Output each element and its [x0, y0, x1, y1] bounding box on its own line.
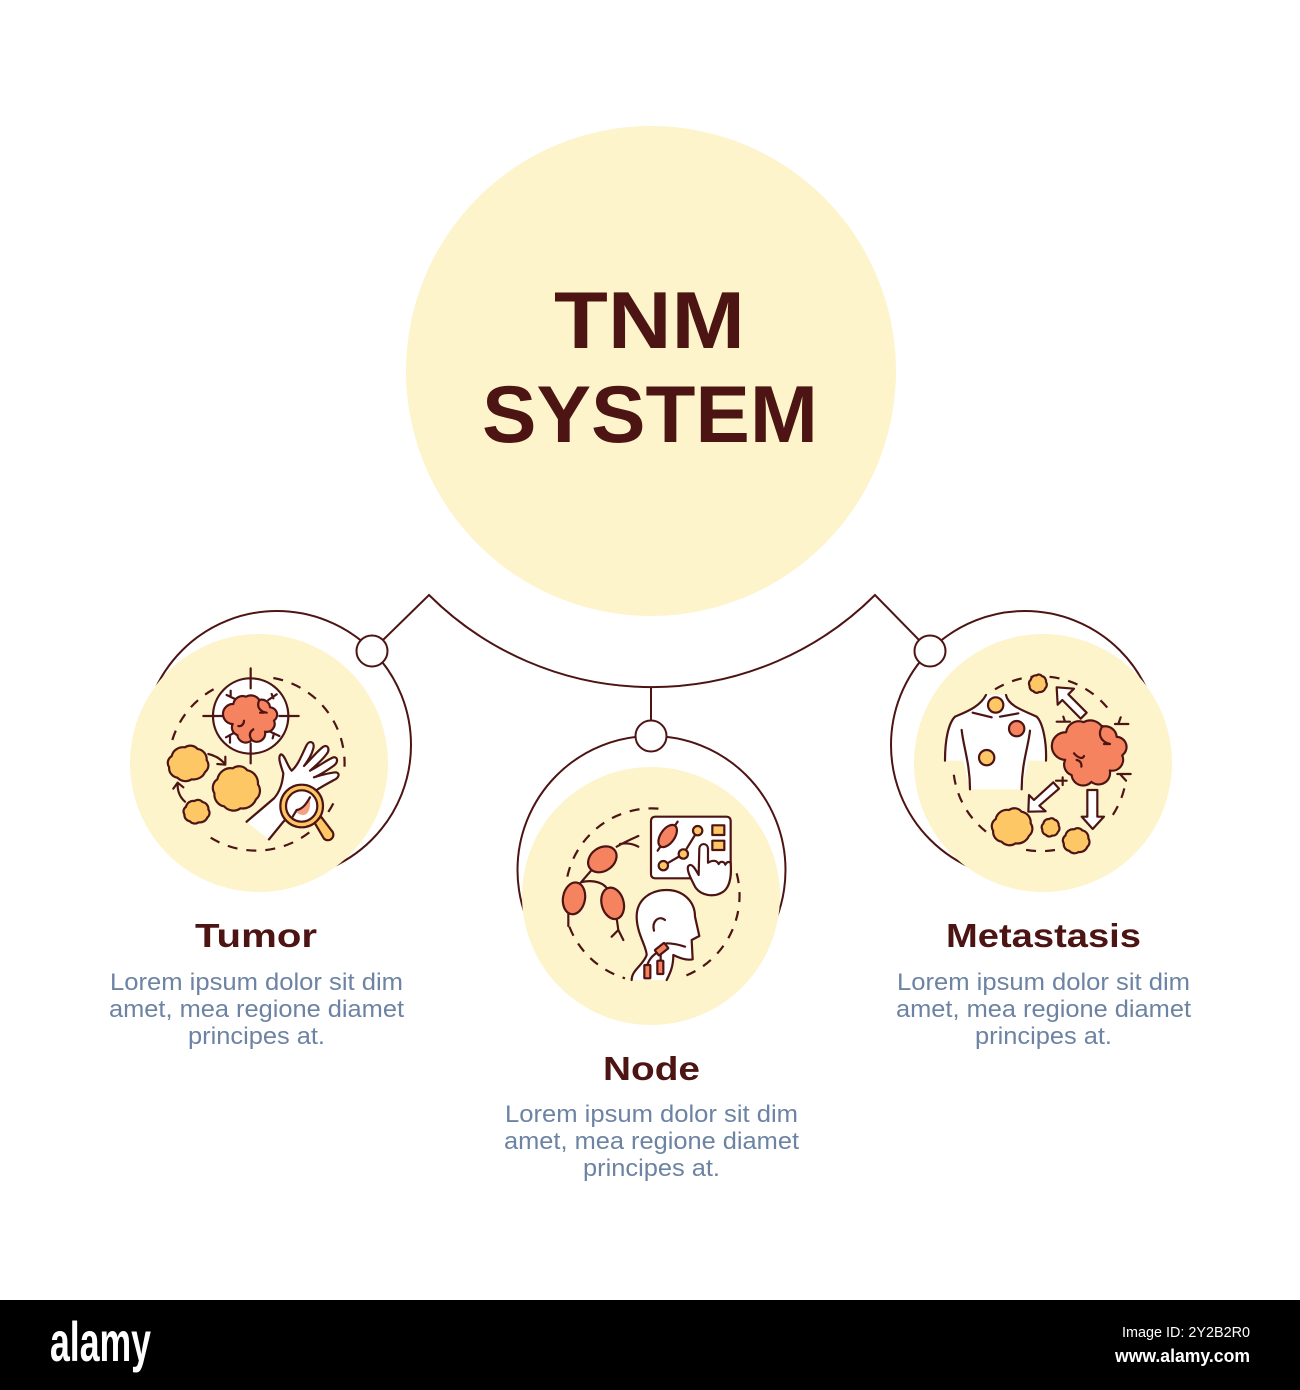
central circle with title — [406, 126, 896, 616]
icon: tumor — [168, 668, 345, 851]
text: metastasis description: Lorem ipsum dolor sit dim — [897, 969, 1190, 996]
text: metastasis description: amet, mea regione diamet — [896, 996, 1191, 1023]
text: node description: amet, mea regione diamet — [504, 1128, 799, 1155]
text: node description: principes at. — [583, 1155, 720, 1182]
connector lines — [383, 595, 919, 721]
text: tumor description — [109, 969, 404, 1050]
text: node description: Lorem ipsum dolor sit dim — [505, 1101, 798, 1128]
label: Metastasis: Metastasis — [946, 917, 1141, 954]
text: metastasis description — [896, 969, 1191, 1050]
icon: lymph nodes — [560, 808, 740, 980]
icon: metastasis — [945, 675, 1131, 853]
label: Node: Node — [603, 1050, 700, 1087]
footer image id: Image ID: 2Y2B2R0 — [1122, 1324, 1250, 1341]
footer logo: alamy — [50, 1310, 151, 1373]
panel: tumor — [109, 611, 411, 1050]
footer url: www.alamy.com — [1114, 1346, 1250, 1366]
title: SYSTEM — [482, 370, 818, 460]
title: TNM — [554, 276, 745, 366]
text: metastasis description: principes at. — [975, 1023, 1112, 1050]
title — [482, 276, 818, 460]
panel: metastasis — [891, 611, 1191, 1050]
text: node description — [504, 1101, 799, 1182]
text: tumor description: principes at. — [188, 1023, 325, 1050]
footer bar — [0, 1300, 1300, 1390]
text: tumor description: Lorem ipsum dolor sit dim — [110, 969, 403, 996]
label: Tumor: Tumor — [195, 917, 317, 954]
panel: node — [504, 720, 799, 1182]
text: tumor description: amet, mea regione diamet — [109, 996, 404, 1023]
